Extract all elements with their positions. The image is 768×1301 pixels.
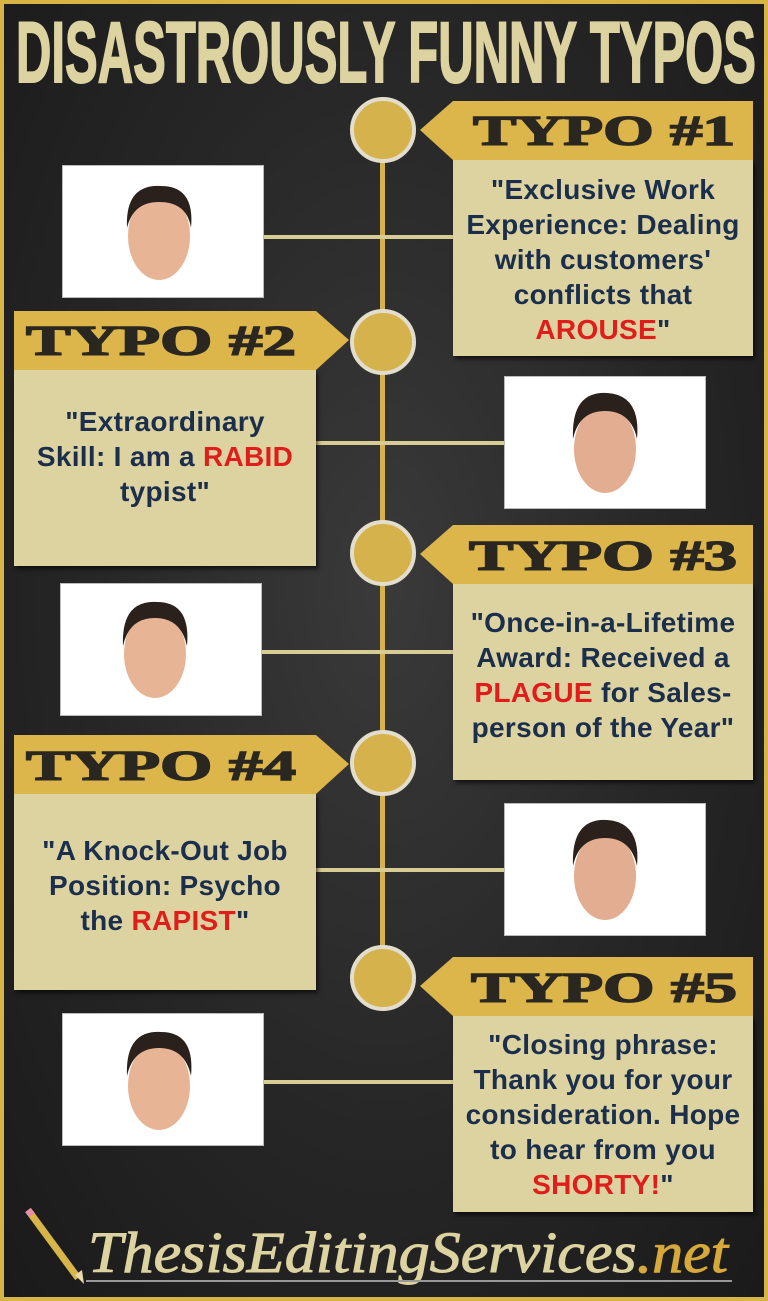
text: typo 4: Position: Psycho xyxy=(49,870,281,901)
panel: typo 4 xyxy=(14,735,349,994)
text: typo 1 xyxy=(453,160,753,356)
header: typo 5 xyxy=(453,957,753,1016)
text: typo 5: to hear from you xyxy=(490,1134,716,1165)
footer logo: ThesisEditingServices .net xyxy=(88,1220,730,1285)
text: typo 1: Experience: Dealing xyxy=(466,209,740,240)
header: typo 1 xyxy=(453,101,753,160)
text: typo 1: conflicts that xyxy=(514,279,692,310)
panel: typo 3 xyxy=(420,525,756,784)
header: typo 5: TYPO #5 xyxy=(471,966,737,1012)
text: typo 3: person of the Year" xyxy=(472,712,734,743)
header: typo 3: TYPO #3 xyxy=(469,534,737,580)
text: typo 2: "Extraordinary xyxy=(65,406,265,437)
text: typo 4: the RAPIST" xyxy=(80,905,250,936)
text: typo 5: SHORTY!" xyxy=(532,1169,674,1200)
panel: typo 5 xyxy=(420,957,756,1216)
photo 5 xyxy=(62,1013,264,1146)
header: typo 3 xyxy=(453,525,753,584)
text: typo 2 xyxy=(14,370,316,566)
text: typo 4 xyxy=(14,794,316,990)
header: typo 4: TYPO #4 xyxy=(26,744,296,790)
header: typo 1: TYPO #1 xyxy=(473,109,735,155)
text: typo 3: "Once-in-a-Lifetime xyxy=(471,607,735,638)
text: typo 2: Skill: I am a RABID xyxy=(37,441,293,472)
photo 2 xyxy=(504,376,706,509)
text: typo 5: consideration. Hope xyxy=(466,1099,740,1130)
timeline dots xyxy=(350,97,416,163)
text: typo 1: AROUSE" xyxy=(535,314,671,345)
photo 1 xyxy=(62,165,264,298)
text: typo 3: Award: Received a xyxy=(476,642,730,673)
text: typo 4: "A Knock-Out Job xyxy=(42,835,288,866)
header: typo 2: TYPO #2 xyxy=(26,319,296,365)
text: typo 1: "Exclusive Work xyxy=(491,174,715,205)
panel: typo 2 xyxy=(14,311,349,570)
photo 3 xyxy=(60,583,262,716)
connectors xyxy=(263,235,457,239)
icon: pencil xyxy=(25,1208,84,1284)
text: typo 5 xyxy=(453,1016,753,1212)
header: typo 4 xyxy=(14,735,316,794)
text: typo 3 xyxy=(453,584,753,780)
text: typo 5: Thank you for your xyxy=(474,1064,732,1095)
header: typo 2 xyxy=(14,311,316,370)
panel: typo 1 xyxy=(420,101,756,360)
timeline line xyxy=(380,134,385,984)
text: typo 3: PLAGUE for Sales- xyxy=(474,677,732,708)
text: typo 1: with customers' xyxy=(495,244,711,275)
text: typo 2: typist" xyxy=(120,476,210,507)
photo 4 xyxy=(504,803,706,936)
text: typo 5: "Closing phrase: xyxy=(488,1029,718,1060)
